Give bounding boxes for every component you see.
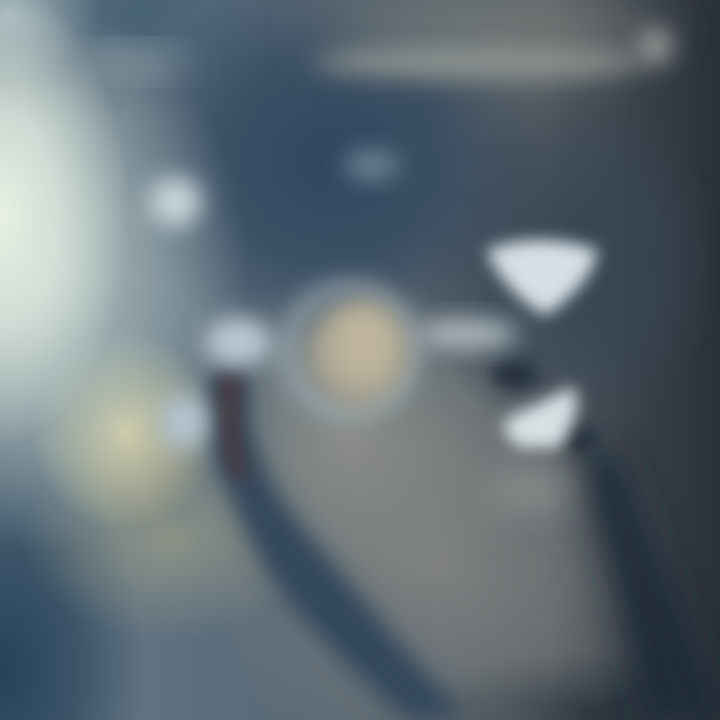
right connector bar — [418, 319, 518, 349]
top grey band — [320, 2, 660, 58]
dark spots — [491, 360, 599, 455]
diamond shape — [486, 240, 598, 316]
lower left node — [160, 395, 208, 449]
curved dark stem — [210, 372, 470, 720]
right dark stem — [575, 450, 720, 720]
left connected node — [204, 318, 272, 366]
faint floating shapes — [149, 150, 400, 227]
faint lower blob — [488, 470, 572, 510]
circle with beige center — [288, 288, 412, 412]
top light streak — [70, 28, 672, 76]
small diamond shape — [504, 386, 577, 448]
